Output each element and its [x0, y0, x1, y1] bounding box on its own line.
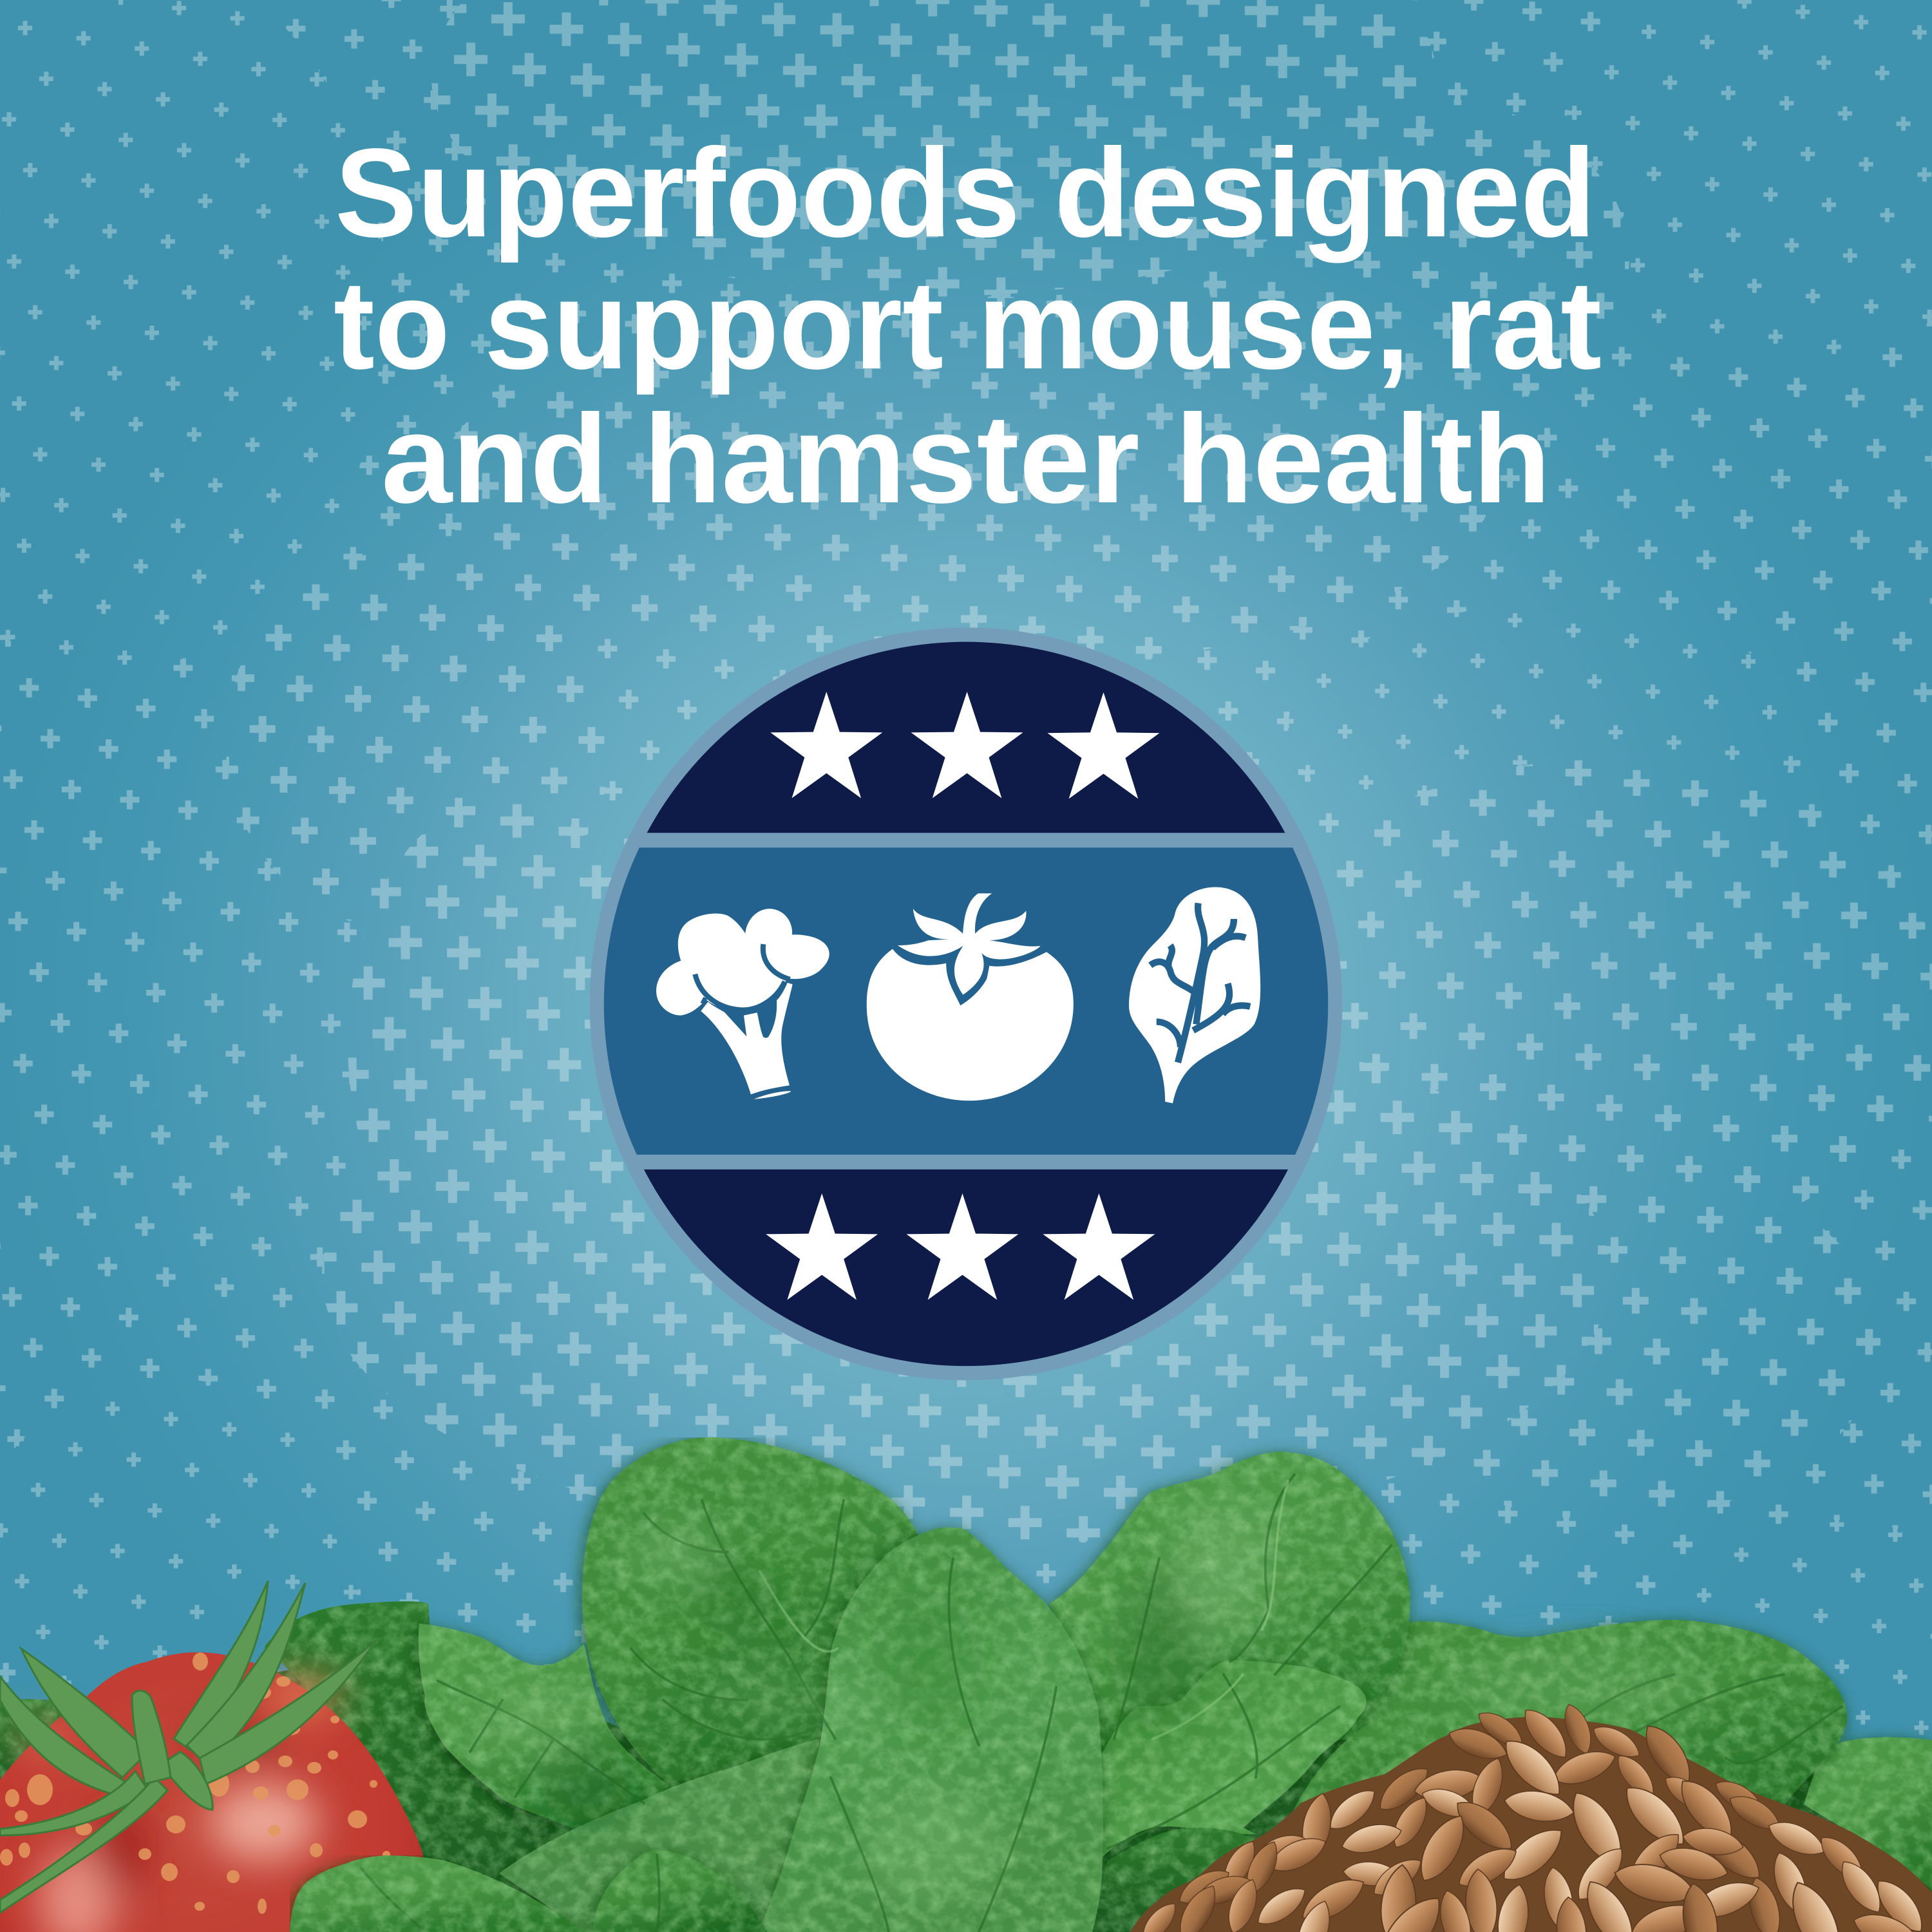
leaf veins and shading: [438, 1475, 1842, 1932]
icon: spinach leaf: [1129, 887, 1260, 1103]
flaxseed pile: [1130, 1701, 1932, 1932]
bottom stars: [766, 1193, 1155, 1300]
title: Superfoods designed: [335, 122, 1596, 263]
spinach leaves: [0, 1437, 1932, 1932]
tomato: [0, 1653, 433, 1932]
title: and hamster health: [381, 388, 1551, 529]
water droplets: [0, 1653, 390, 1914]
spinach leaf in front of tomato: [290, 1855, 585, 1932]
title: [334, 122, 1602, 529]
tomato stem and sepals: [0, 1581, 376, 1913]
icon: tomato: [867, 893, 1074, 1101]
food photo: spinach leaves, tomato, flaxseed: [0, 1437, 1932, 1932]
title: to support mouse, rat: [334, 254, 1602, 395]
icon: broccoli: [656, 909, 829, 1099]
badge: superfoods seal: [590, 627, 1342, 1381]
top stars: [770, 692, 1159, 799]
